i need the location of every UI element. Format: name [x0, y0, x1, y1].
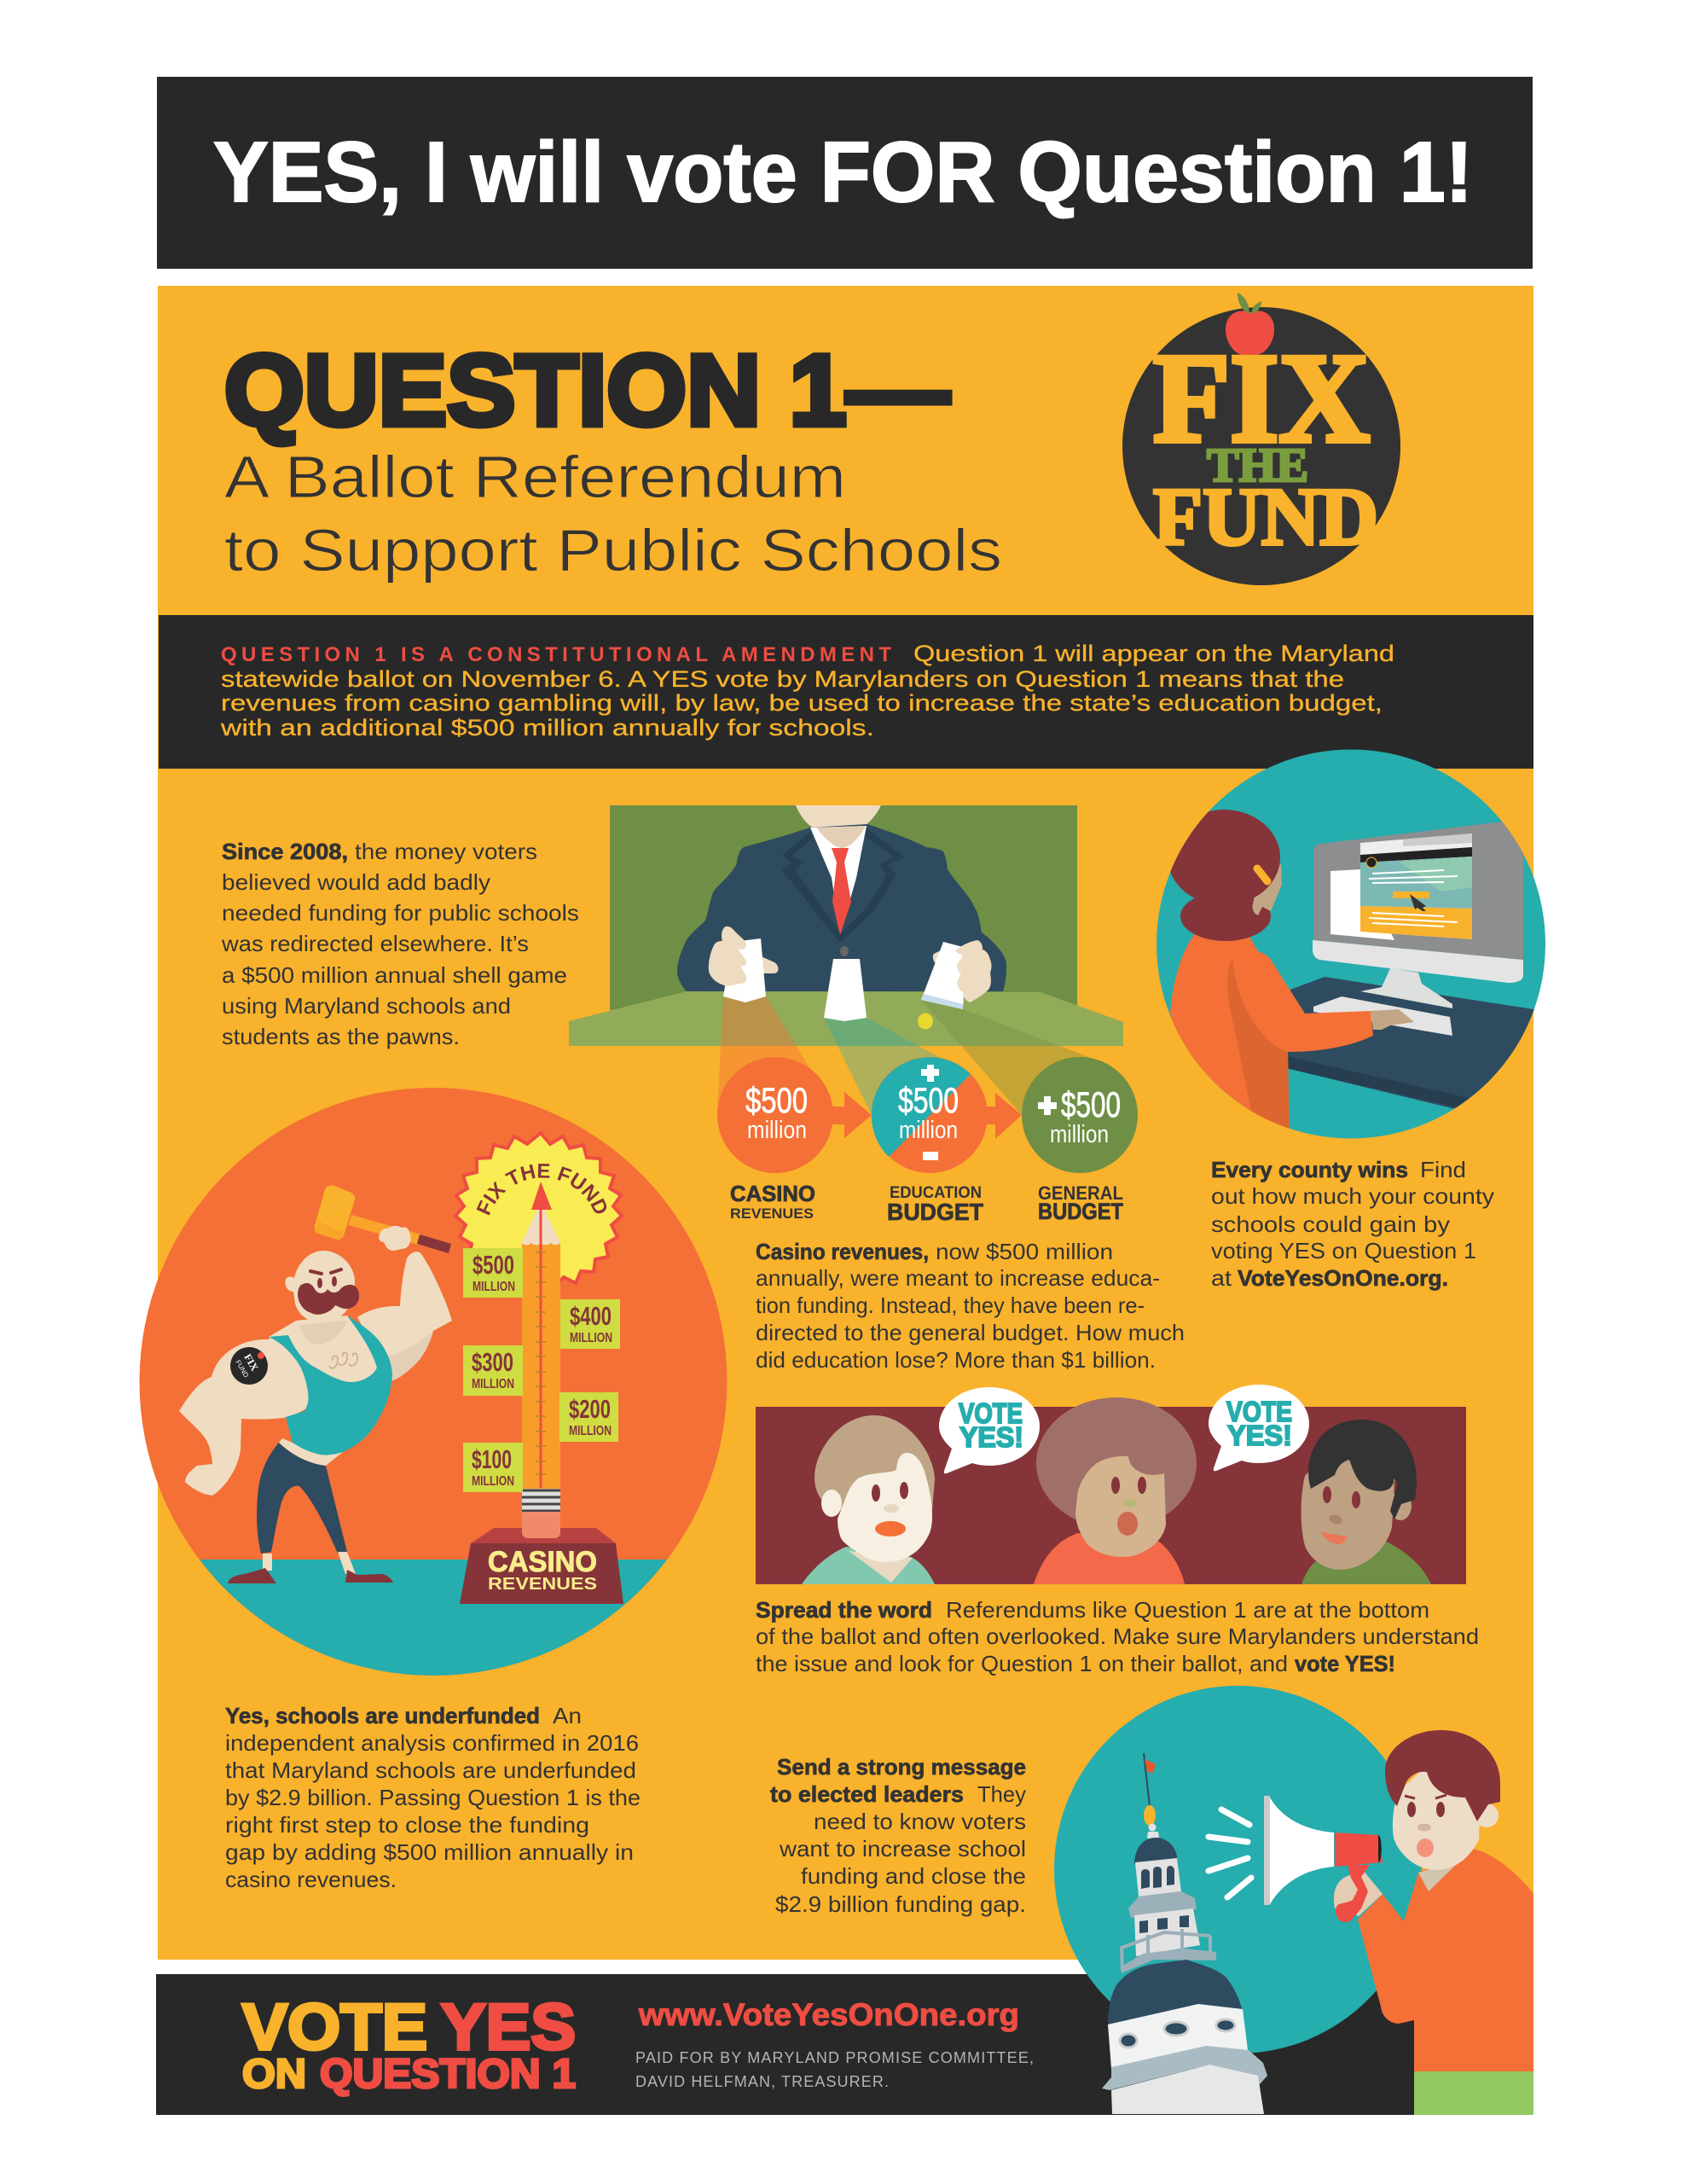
text: every county wins: schools could gain by	[1211, 1211, 1450, 1237]
panel: constitutional amendment	[159, 615, 1533, 769]
illustration: strongman and pencil high striker	[140, 1088, 727, 1676]
face	[1253, 864, 1282, 915]
text: yes, schools are underfunded: Yes, schools are underfunded	[225, 1703, 540, 1728]
arrow	[832, 1092, 872, 1138]
text: casino revenues: directed to the general budget. How much	[756, 1320, 1185, 1345]
panel: orange background	[158, 286, 1533, 1960]
head	[285, 1251, 355, 1322]
labels	[730, 1181, 1123, 1225]
tag: $400 million: MILLION	[570, 1331, 612, 1345]
tag: $300 million: MILLION	[472, 1377, 514, 1391]
text: send a strong message	[770, 1754, 1026, 1917]
tag: $300 million	[463, 1345, 523, 1396]
text: since 2008: students as the pawns.	[222, 1024, 460, 1049]
tag: $200 million: $200	[569, 1394, 611, 1424]
fist	[379, 1226, 411, 1251]
text: yes, schools are underfunded: by $2.9 billion. Passing Question 1 is the	[225, 1785, 641, 1810]
bubble: vote yes 1: YES!	[959, 1421, 1023, 1453]
text: spread the word: vote YES!	[1295, 1651, 1395, 1676]
starburst: FIX THE FUND	[476, 1164, 607, 1215]
tag: $100 million	[463, 1443, 523, 1492]
keyboard	[1313, 996, 1452, 1036]
text: spread the word: of the ballot and often overlooked. Make sure Marylanders understand	[756, 1623, 1479, 1649]
circle: education budget: $500	[898, 1080, 959, 1120]
logo: Fix the Fund: THE	[1207, 439, 1308, 492]
person 1	[802, 1415, 935, 1584]
title banner	[157, 77, 1533, 269]
panel: constitutional amendment: revenues from casino gambling will, by law, be used to increase the state’s education budget,	[221, 690, 1383, 716]
circle: general budget: $500	[1061, 1084, 1121, 1124]
icon: apple	[1226, 293, 1274, 355]
vote yes on question 1: VOTE	[242, 1991, 427, 2064]
circle: general budget	[1022, 1057, 1138, 1173]
illustration: vote yes banner with people	[756, 1385, 1466, 1584]
pencil	[522, 1182, 560, 1512]
text: since 2008: believed would add badly	[222, 869, 490, 895]
person with megaphone	[1358, 1730, 1533, 2115]
base: casino revenues: CASINO	[488, 1546, 597, 1578]
hair upper	[1168, 810, 1280, 905]
text: casino revenues: Casino revenues,	[756, 1239, 929, 1264]
tag: $100 million: $100	[472, 1444, 512, 1474]
labels: BUDGET	[887, 1199, 983, 1225]
arrow	[985, 1093, 1022, 1139]
text: since 2008: using Maryland schools and	[222, 993, 511, 1019]
table	[569, 991, 1123, 1046]
logo: Fix the Fund: FUND	[1153, 471, 1378, 562]
tattoo: FIX	[241, 1351, 261, 1374]
text: yes, schools are underfunded: right first step to close the funding	[225, 1812, 589, 1838]
text: send a strong message: want to increase school	[779, 1836, 1026, 1862]
tag: $200 million	[559, 1392, 618, 1442]
text: since 2008: the money voters	[355, 839, 537, 864]
circle: casino $500: $500	[745, 1080, 808, 1120]
labels: CASINO	[730, 1181, 815, 1206]
text: casino revenues: did education lose? More than $1 billion.	[756, 1347, 1156, 1373]
cups and hands	[709, 926, 991, 1029]
circle: casino $500: million	[747, 1117, 807, 1144]
text: yes, schools are underfunded: casino revenues.	[225, 1867, 397, 1892]
left hand	[709, 926, 746, 986]
text: casino revenues: annually, were meant to increase educa-	[756, 1265, 1160, 1291]
text: yes, schools are underfunded: that Maryland schools are underfunded	[225, 1757, 636, 1783]
vest	[269, 1316, 392, 1455]
beams	[717, 996, 1098, 1115]
labels: GENERAL	[1038, 1182, 1123, 1204]
text: send a strong message: to elected leaders	[770, 1781, 964, 1807]
illustration: megaphone and state house	[1054, 1686, 1533, 2115]
bubble: vote yes 1: VOTE	[959, 1397, 1023, 1429]
tag: $200 million: MILLION	[569, 1424, 612, 1438]
tag: $500 million: $500	[472, 1250, 514, 1280]
bubble: vote yes 2	[1209, 1385, 1309, 1471]
text: since 2008: a $500 million annual shell game	[222, 962, 567, 988]
illustration: shell game	[569, 805, 1123, 1115]
bubble: vote yes 1	[939, 1387, 1040, 1473]
text: send a strong message: They	[977, 1781, 1026, 1807]
flow: casino revenues to general budget	[717, 1057, 1138, 1225]
tattoo: FUND	[234, 1358, 250, 1379]
ground	[200, 1560, 667, 1676]
tag: $500 million: MILLION	[472, 1280, 515, 1294]
vote yes on question 1	[242, 1991, 576, 2097]
tag: $400 million	[560, 1299, 620, 1349]
hammer	[315, 1186, 451, 1253]
sound lines	[1209, 1809, 1251, 1897]
text: spread the word: the issue and look for Question 1 on their ballot, and	[756, 1651, 1288, 1676]
panel: constitutional amendment: Question 1 will appear on the Maryland	[913, 641, 1394, 666]
text: spread the word: Referendums like Question 1 are at the bottom	[946, 1597, 1429, 1623]
title banner: YES, I will vote FOR Question 1!	[213, 125, 1473, 220]
panel: constitutional amendment: with an additional $500 million annually for schools.	[220, 715, 874, 741]
starburst	[453, 1130, 624, 1286]
tag: $100 million: MILLION	[472, 1474, 514, 1489]
panel: constitutional amendment: statewide ballot on November 6. A YES vote by Marylanders on Question 1 means that the	[221, 666, 1344, 692]
tag: $300 million: $300	[472, 1347, 513, 1377]
hair lower	[1180, 897, 1271, 941]
text: send a strong message: funding and close the	[801, 1863, 1026, 1889]
right arm	[357, 1252, 452, 1381]
text: send a strong message: Send a strong message	[777, 1754, 1026, 1780]
text: every county wins: at	[1211, 1265, 1232, 1291]
text: every county wins	[1211, 1157, 1494, 1291]
text: every county wins: VoteYesOnOne.org.	[1238, 1265, 1448, 1291]
man in suit	[677, 805, 1006, 991]
person body	[1170, 932, 1373, 1143]
right hand	[955, 940, 991, 1002]
vote yes on question 1: YES	[441, 1991, 576, 2064]
subheading: to Support Public Schools	[224, 517, 1002, 584]
text: every county wins: voting YES on Question 1	[1211, 1238, 1476, 1263]
vote yes on question 1: QUESTION 1	[320, 2052, 576, 2097]
text: since 2008	[221, 839, 579, 1049]
text: since 2008: Since 2008,	[222, 839, 348, 864]
person 2	[1034, 1397, 1197, 1584]
icon: megaphone	[1264, 1796, 1383, 1922]
desk	[1288, 977, 1534, 1109]
subheading	[224, 444, 1002, 584]
logo: Fix the Fund	[1122, 293, 1400, 585]
labels: EDUCATION	[890, 1184, 982, 1202]
state house dome	[1102, 1753, 1267, 2114]
text: yes, schools are underfunded	[225, 1703, 641, 1892]
legs	[257, 1443, 347, 1554]
monitor	[1313, 821, 1523, 960]
bubble: vote yes 2: YES!	[1227, 1420, 1292, 1451]
circle: general budget: million	[1050, 1121, 1109, 1148]
labels: REVENUES	[730, 1205, 814, 1222]
paid for by: DAVID HELFMAN, TREASURER.	[635, 2073, 889, 2090]
text: since 2008: was redirected elsewhere. It’s	[221, 931, 529, 956]
text: every county wins: Every county wins	[1211, 1157, 1408, 1182]
text: send a strong message: $2.9 billion funding gap.	[775, 1891, 1026, 1917]
text: casino revenues	[756, 1239, 1185, 1373]
text: yes, schools are underfunded: gap by adding $500 million annually in	[225, 1839, 634, 1865]
person 3	[1301, 1420, 1431, 1584]
website: www.VoteYesOnOne.org	[638, 1997, 1019, 2032]
text: casino revenues: now $500 million	[936, 1239, 1113, 1264]
text: since 2008: needed funding for public schools	[222, 900, 579, 926]
circle: casino $500	[717, 1057, 833, 1173]
paid for by	[635, 2049, 1034, 2090]
subheading: A Ballot Referendum	[224, 444, 846, 510]
circle: education budget: million	[899, 1117, 958, 1144]
circle: education budget	[872, 1057, 988, 1173]
logo: Fix the Fund: FIX	[1153, 328, 1370, 469]
tag: $500 million	[463, 1248, 523, 1298]
labels: BUDGET	[1038, 1199, 1123, 1224]
left arm	[179, 1339, 309, 1496]
strongman	[179, 1186, 452, 1583]
text: spread the word: Spread the word	[756, 1597, 932, 1623]
text: casino revenues: tion funding. Instead, they have been re-	[756, 1292, 1145, 1318]
tattoo	[230, 1347, 268, 1385]
panel: constitutional amendment: QUESTION 1 IS A CONSTITUTIONAL AMENDMENT	[221, 643, 891, 666]
heading: Question 1: QUESTION 1—	[224, 334, 949, 447]
illustration: person at computer	[1157, 749, 1561, 1143]
text: yes, schools are underfunded: independent analysis confirmed in 2016	[225, 1730, 639, 1756]
base: casino revenues	[460, 1512, 623, 1604]
base: casino revenues: REVENUES	[488, 1575, 597, 1594]
text: yes, schools are underfunded: An	[553, 1703, 582, 1728]
bubble: vote yes 2: VOTE	[1226, 1396, 1292, 1427]
paid for by: PAID FOR BY MARYLAND PROMISE COMMITTEE,	[635, 2049, 1034, 2066]
chest	[269, 1316, 392, 1399]
text: send a strong message: need to know voters	[814, 1809, 1026, 1834]
vote yes on question 1: ON	[242, 2052, 306, 2097]
text: every county wins: out how much your county	[1211, 1183, 1494, 1209]
text: every county wins: Find	[1420, 1157, 1466, 1182]
panel: footer	[156, 1974, 1533, 2115]
belly	[279, 1438, 343, 1466]
text: spread the word	[756, 1597, 1479, 1676]
tag: $400 million: $400	[570, 1301, 612, 1331]
